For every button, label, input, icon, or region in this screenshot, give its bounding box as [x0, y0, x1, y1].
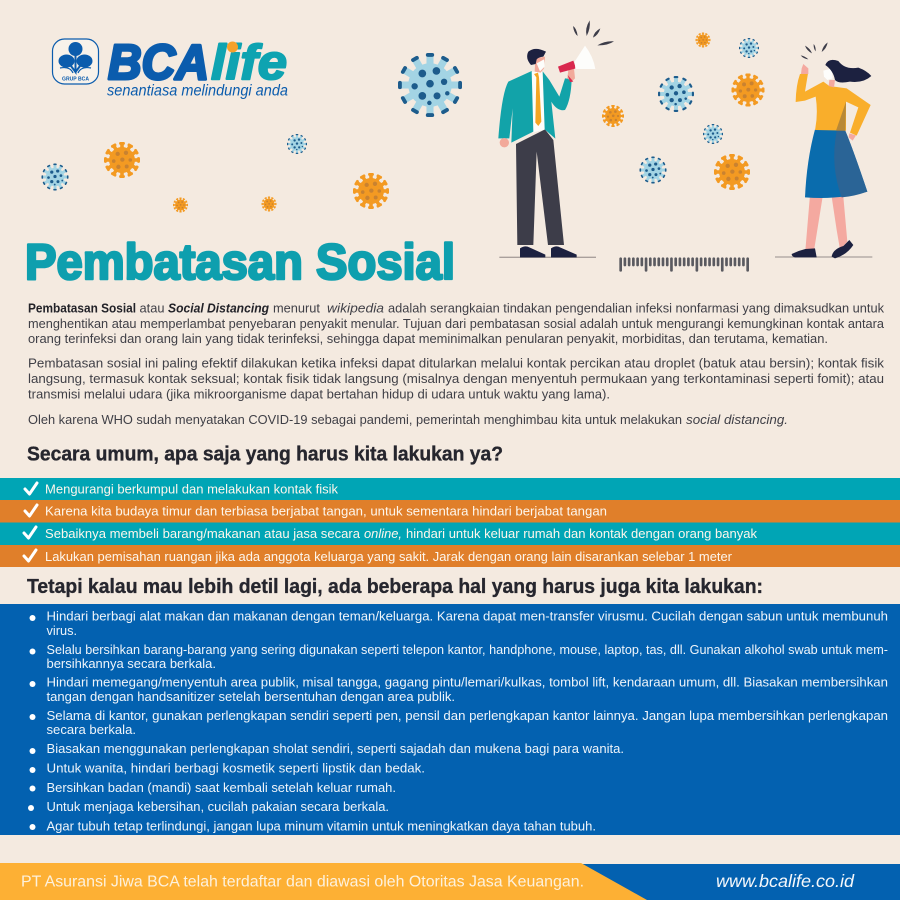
wordmark: BCA: BCA — [108, 36, 209, 90]
illustration: man with megaphone — [498, 20, 614, 257]
list text: Selama di kantor, gunakan perlengkapan sendiri seperti pen, pensil dan perlengkapan kantor lainnya. Jangan lupa membersihkan perlengkapan — [46, 709, 888, 723]
list item 2 — [0, 500, 900, 522]
icon: virus small orange — [262, 196, 276, 212]
icon: BCA group emblem: GRUP BCA — [62, 76, 89, 82]
illustration: woman shouting — [775, 42, 872, 258]
list item 3: hindari untuk keluar rumah dan kontak dengan orang banyak — [406, 527, 758, 541]
list item 3: Sebaiknya membeli barang/makanan atau jasa secara — [45, 527, 360, 541]
text block: paragraph 2: langsung, termasuk kontak seksual; kontak fisik tidak langsung (misalnya dengan menyentuh permukaan yang terkontaminasi seperti fomit); atau — [28, 372, 884, 386]
icon: virus large blue — [398, 53, 462, 117]
icon: orange dot of the i — [227, 42, 238, 52]
list text: Selalu bersihkan barang-barang yang sering digunakan seperti telepon kantor, handphone, mouse, laptop, tas, dll. Gunakan alkohol swab untuk mem- — [46, 643, 888, 657]
list text — [46, 610, 888, 834]
tagline: senantiasa melindungi anda — [107, 82, 288, 100]
icon: BCA group emblem — [52, 39, 98, 84]
list text: Hindari berbagi alat makan dan makanan dengan teman/keluarga. Karena dapat men-transfer virusmu. Cucilah dengan sabun untuk membunuh — [46, 610, 888, 624]
text block: paragraph 1: atau — [140, 302, 164, 316]
icon: virus blue — [703, 124, 723, 144]
list item 4 — [0, 545, 900, 567]
text block: paragraph 1: Pembatasan Sosial — [28, 302, 136, 316]
list item 4: Lakukan pemisahan ruangan jika ada anggota keluarga yang sakit. Jarak dengan orang lain disarankan selebar 1 meter — [45, 550, 732, 564]
text block: paragraph 1: menurut — [273, 302, 321, 316]
list text: Untuk menjaga kebersihan, cucilah pakaian secara berkala. — [46, 800, 389, 814]
title: Pembatasan Sosial — [25, 234, 455, 290]
text block: paragraph 1 — [28, 302, 885, 346]
icon: virus blue — [287, 134, 307, 154]
list text: virus. — [46, 624, 77, 638]
heading: general actions: Secara umum, apa saja yang harus kita lakukan ya? — [27, 442, 503, 466]
footer website: www.bcalife.co.id — [716, 871, 855, 891]
icon: virus orange — [732, 74, 764, 106]
wordmark: life: life — [211, 36, 287, 90]
list item 3 — [0, 522, 900, 545]
heading: detailed actions: Tetapi kalau mau lebih detil lagi, ada beberapa hal yang harus juga kita lakukan: — [27, 575, 763, 598]
text block: paragraph 3: social distancing. — [686, 413, 788, 427]
text block: paragraph 3: Oleh karena WHO sudah menyatakan COVID-19 sebagai pandemi, pemerintah menghimbau kita untuk melakukan — [28, 413, 682, 427]
list text: tangan dengan handsanitizer setelah bersentuhan dengan area publik. — [46, 690, 455, 704]
text block: paragraph 1: Social Distancing — [168, 302, 269, 316]
icon: virus blue — [739, 38, 759, 58]
text block: paragraph 2 — [28, 357, 885, 401]
list text: secara berkala. — [46, 723, 136, 737]
footer band — [0, 863, 900, 900]
icon: virus small orange — [173, 198, 188, 212]
icon: virus small orange — [696, 32, 710, 48]
list text: Agar tubuh tetap terlindungi, jangan lupa minum vitamin untuk meningkatkan daya tahan tubuh. — [46, 820, 596, 834]
panel: detailed actions list — [0, 604, 900, 835]
text block: paragraph 1: menghentikan atau memperlambat penyebaran penyakit menular. Tujuan dari pembatasan sosial adalah untuk mengurangi kemungkinan kontak antara — [28, 317, 884, 331]
list text: Biasakan menggunakan perlengkapan sholat sendiri, seperti sajadah dan mukena bagi para wanita. — [46, 742, 624, 756]
icon: virus orange — [353, 173, 389, 209]
text block: paragraph 1: wikipedia — [327, 302, 384, 316]
panel: general actions checklist — [0, 478, 900, 567]
text block: paragraph 2: Pembatasan sosial ini paling efektif dilakukan ketika infeksi dapat ditularkan melalui kontak percikan atau droplet (batuk atau bersin); kontak fisik — [28, 357, 885, 371]
icon: virus orange — [104, 142, 140, 178]
list item 2: Karena kita budaya timur dan terbiasa berjabat tangan, untuk sementara hindari berjabat tangan — [45, 505, 607, 519]
footer disclaimer: PT Asuransi Jiwa BCA telah terdaftar dan diawasi oleh Otoritas Jasa Keuangan. — [21, 874, 584, 890]
list item 1: Mengurangi berkumpul dan melakukan kontak fisik — [45, 482, 339, 496]
icon: virus blue — [658, 76, 694, 112]
text block: paragraph 1: orang terinfeksi dan orang lain yang tidak terinfeksi, sehingga dapat meminimalkan penularan penyakit, morbiditas, dan terutama, kematian. — [28, 332, 828, 346]
icon: virus blue — [640, 156, 666, 184]
bullet points — [28, 615, 36, 830]
icon: virus orange — [602, 105, 624, 127]
text block: paragraph 1: adalah serangkaian tindakan pengendalian infeksi nonfarmasi yang dimaksudkan untuk — [388, 302, 885, 316]
list text: Hindari memegang/menyentuh area publik, misal tangga, gagang pintu/lemari/kulkas, tombol lift, kendaraan umum, dll. Biasakan membersihkan — [46, 676, 888, 690]
text block: paragraph 2: transmisi melalui udara (jika mikroorganisme dapat bertahan hidup di udara untuk waktu yang lama). — [28, 387, 610, 401]
list text: bersihkannya secara berkala. — [46, 657, 216, 671]
list item 3: online, — [364, 527, 402, 541]
logo: BCA life — [52, 36, 288, 100]
illustration: distance ruler — [621, 259, 748, 270]
list text: Bersihkan badan (mandi) saat kembali setelah keluar rumah. — [46, 781, 396, 795]
icon: virus orange — [714, 154, 750, 190]
list text: Untuk wanita, hindari berbagi kosmetik seperti lipstik dan bedak. — [46, 762, 425, 776]
icon: virus blue — [42, 164, 68, 190]
list item 1 — [0, 478, 900, 500]
